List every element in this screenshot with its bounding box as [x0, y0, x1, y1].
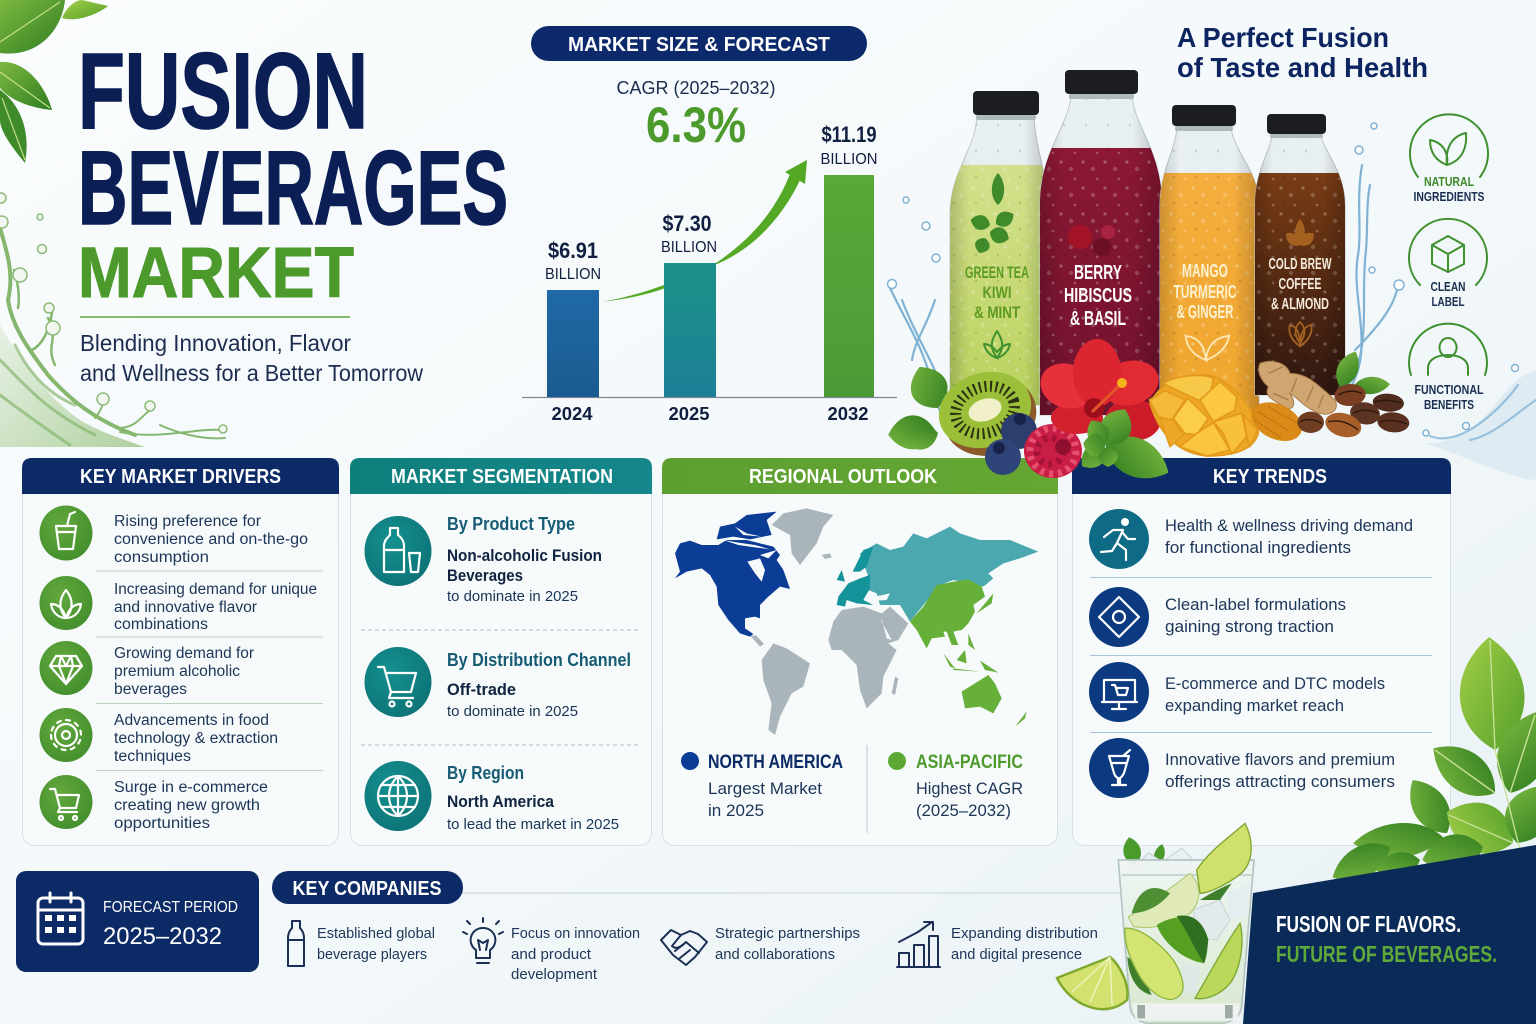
company point: global players: Established global — [317, 925, 435, 942]
segment: product type — [364, 514, 602, 605]
segment: distribution channel: By Distribution Channel — [447, 650, 631, 670]
driver: flavor innovation: Increasing demand for unique — [114, 581, 317, 598]
bar: 2032: 2032 — [828, 404, 868, 424]
legend: north america: Largest Market — [708, 779, 822, 798]
bottle: berry hibiscus and basil: & BASIL — [1070, 307, 1126, 330]
feature badge: functional benefits: BENEFITS — [1424, 398, 1474, 412]
bar: 2024: 2024 — [552, 404, 592, 424]
forecast period box: FORECAST PERIOD — [103, 899, 238, 916]
bottle: cold brew coffee and almond: & ALMOND — [1271, 296, 1329, 313]
trend: health and wellness — [1089, 509, 1413, 569]
bottle: cold brew coffee and almond — [1250, 114, 1350, 398]
company point: innovation — [463, 918, 640, 983]
bar: 2025 — [661, 211, 717, 424]
feature badge: functional benefits — [1409, 324, 1487, 412]
trend: clean label — [1089, 587, 1346, 647]
segment: distribution channel — [364, 647, 631, 720]
heading: key market drivers: KEY MARKET DRIVERS — [80, 466, 281, 488]
bottle: mango turmeric and ginger: MANGO — [1182, 261, 1228, 281]
legend: north america: in 2025 — [708, 801, 764, 820]
feature badge: functional benefits: FUNCTIONAL — [1414, 383, 1484, 397]
trend: premium offerings: Innovative flavors and premium — [1165, 750, 1395, 769]
bar: 2024 — [545, 238, 601, 424]
bottle: mango turmeric and ginger: TURMERIC — [1174, 282, 1236, 302]
driver: flavor innovation: and innovative flavor — [114, 599, 257, 616]
heading: key trends — [1072, 458, 1451, 494]
feature badge: clean label: CLEAN — [1430, 280, 1466, 294]
bottle: green tea kiwi and mint: KIWI — [982, 283, 1012, 302]
company point: distribution: and digital presence — [951, 946, 1082, 963]
segment: product type: By Product Type — [447, 514, 575, 534]
driver: flavor innovation: combinations — [114, 616, 208, 633]
growth arrow — [603, 160, 807, 302]
driver: premium beverages: premium alcoholic — [114, 663, 240, 680]
forecast period box — [16, 871, 259, 972]
bar chart — [522, 122, 897, 424]
trend: clean label: Clean-label formulations — [1165, 595, 1346, 614]
bottle: green tea kiwi and mint: & MINT — [974, 303, 1020, 322]
heading: regional outlook — [662, 458, 1058, 494]
hibiscus flower — [1034, 339, 1164, 441]
fruit and ingredient cluster — [886, 339, 1410, 490]
market size heading: MARKET SIZE & FORECAST — [568, 33, 830, 56]
heading: market segmentation — [350, 458, 652, 494]
world map — [675, 508, 1038, 735]
mango — [1149, 375, 1258, 456]
mango, ginger, turmeric and coffee beans — [1149, 347, 1410, 456]
segment: distribution channel: Off-trade — [447, 681, 516, 699]
water splash: around bottles — [888, 123, 1404, 428]
subtitle: Blending Innovation, Flavor — [80, 330, 351, 356]
bottle: berry hibiscus and basil — [1035, 70, 1165, 418]
title: BEVERAGES — [78, 130, 508, 247]
legend: asia-pacific: (2025–2032) — [916, 801, 1011, 820]
driver: convenience: convenience and on-the-go — [114, 531, 308, 548]
feature badge: natural ingredients: NATURAL — [1424, 175, 1474, 189]
company point: innovation: Focus on innovation — [511, 925, 640, 942]
segment: region: By Region — [447, 763, 524, 783]
title — [78, 30, 508, 317]
bottle: cold brew coffee and almond: COFFEE — [1278, 276, 1322, 293]
trend: e-commerce and DTC: expanding market reach — [1165, 696, 1344, 715]
driver: flavor innovation — [40, 576, 317, 633]
feature badge: natural ingredients: INGREDIENTS — [1414, 190, 1484, 204]
panel: key trends — [1072, 458, 1451, 846]
trend: health and wellness: for functional ingredients — [1165, 538, 1351, 557]
blueberries — [985, 413, 1037, 475]
trend: health and wellness: Health & wellness driving demand — [1165, 516, 1413, 535]
legend: north america: NORTH AMERICA — [708, 752, 843, 773]
driver: e-commerce: creating new growth — [114, 797, 260, 814]
driver: convenience — [40, 506, 308, 566]
company point: global players: beverage players — [317, 946, 427, 963]
heading: key trends: KEY TRENDS — [1213, 466, 1327, 488]
tagline: taste and health: of Taste and Health — [1177, 52, 1428, 83]
subtitle: and Wellness for a Better Tomorrow — [80, 360, 424, 386]
icon: mojito glass with lime — [1118, 823, 1254, 1023]
bottle: green tea kiwi and mint: GREEN TEA — [965, 263, 1029, 282]
company point: innovation: development — [511, 966, 598, 983]
heading: regional outlook: REGIONAL OUTLOOK — [749, 466, 937, 488]
icon: lime wedge — [1057, 957, 1128, 1009]
company point: partnerships — [661, 925, 860, 965]
coffee beans — [1297, 383, 1410, 441]
driver: e-commerce — [40, 775, 268, 832]
bar: 2024: BILLION — [545, 266, 601, 283]
bar: 2032: BILLION — [820, 151, 878, 168]
water splash: left — [0, 193, 227, 447]
bottle: mango turmeric and ginger — [1160, 105, 1260, 412]
bar: 2025: 2025 — [668, 404, 710, 424]
driver: e-commerce: opportunities — [114, 815, 210, 832]
mint sprig: centre — [1075, 402, 1176, 490]
company point: distribution: Expanding distribution — [951, 925, 1098, 942]
bar: 2025: BILLION — [661, 239, 717, 256]
CAGR callout: 6.3% — [646, 97, 746, 153]
heading: market segmentation: MARKET SEGMENTATION — [391, 466, 613, 488]
segment: product type: Non-alcoholic Fusion — [447, 547, 602, 565]
tagline: taste and health: A Perfect Fusion — [1177, 22, 1389, 53]
ginger — [1259, 361, 1336, 414]
trend: e-commerce and DTC — [1089, 662, 1385, 722]
leaves: beside beans — [1331, 347, 1391, 395]
market size heading — [531, 26, 867, 61]
panel: key market drivers — [22, 458, 339, 846]
bottle: mango turmeric and ginger: & GINGER — [1176, 302, 1234, 322]
driver: food technology — [40, 708, 278, 765]
bottle: berry hibiscus and basil: BERRY — [1074, 261, 1122, 284]
water splash: right edge — [1420, 364, 1536, 480]
segment: region: North America — [447, 793, 555, 811]
driver: e-commerce: Surge in e-commerce — [114, 779, 268, 796]
driver: convenience: Rising preference for — [114, 513, 261, 530]
forecast period box: 2025–2032 — [103, 923, 222, 950]
bottle: cold brew coffee and almond: COLD BREW — [1268, 256, 1332, 273]
kiwi — [929, 360, 1047, 468]
company point: partnerships: and collaborations — [715, 946, 835, 963]
driver: premium beverages — [40, 641, 254, 698]
feature badge: natural ingredients — [1410, 114, 1488, 204]
closing banner — [1243, 845, 1536, 1024]
key companies heading: KEY COMPANIES — [292, 878, 442, 900]
panel: market segmentation — [350, 458, 652, 846]
bar: 2032: $11.19 — [822, 122, 876, 147]
company point: innovation: and product — [511, 946, 592, 963]
feature badge: clean label: LABEL — [1432, 295, 1465, 309]
title: MARKET — [78, 234, 354, 313]
bottle: berry hibiscus and basil: HIBISCUS — [1064, 284, 1132, 307]
company point: global players — [288, 921, 435, 966]
icon: calendar — [38, 893, 83, 944]
bottle: green tea kiwi and mint — [950, 91, 1044, 406]
key companies heading — [272, 871, 1120, 904]
legend: asia-pacific — [888, 752, 1023, 820]
driver: food technology: technology & extraction — [114, 730, 278, 747]
tagline: taste and health — [1177, 22, 1428, 83]
heading: key market drivers — [22, 458, 339, 494]
closing banner: FUSION OF FLAVORS. — [1276, 911, 1461, 937]
subtitle — [80, 330, 424, 386]
trend: e-commerce and DTC: E-commerce and DTC models — [1165, 674, 1385, 693]
driver: convenience: consumption — [114, 549, 209, 566]
driver: premium beverages: beverages — [114, 681, 187, 698]
legend: asia-pacific: Highest CAGR — [916, 779, 1023, 798]
trend: clean label: gaining strong traction — [1165, 617, 1334, 636]
leaves: top-left corner — [0, 0, 108, 163]
company point: partnerships: Strategic partnerships — [715, 925, 860, 942]
driver: food technology: Advancements in food — [114, 712, 269, 729]
CAGR callout: CAGR (2025–2032) — [616, 77, 776, 98]
CAGR callout — [616, 77, 776, 153]
legend: asia-pacific: ASIA-PACIFIC — [916, 752, 1023, 773]
driver: food technology: techniques — [114, 748, 191, 765]
leaves: bottom-right — [1325, 635, 1536, 891]
trend: premium offerings — [1089, 738, 1395, 798]
raspberry — [1024, 424, 1082, 478]
bar: 2024: $6.91 — [548, 238, 598, 263]
legend: north america — [681, 752, 843, 820]
segment: region — [364, 761, 619, 833]
turmeric — [1245, 395, 1308, 449]
bar: 2032 — [820, 122, 878, 424]
driver: premium beverages: Growing demand for — [114, 645, 254, 662]
segment: distribution channel: to dominate in 2025 — [447, 704, 578, 720]
segment: region: to lead the market in 2025 — [447, 817, 619, 833]
trend: premium offerings: offerings attracting consumers — [1165, 772, 1395, 791]
segment: product type: Beverages — [447, 567, 523, 585]
bar: 2025: $7.30 — [662, 211, 712, 236]
feature badge: clean label — [1409, 219, 1487, 309]
segment: product type: to dominate in 2025 — [447, 589, 578, 605]
panel: regional outlook — [662, 458, 1058, 846]
title: FUSION — [78, 30, 368, 151]
mint sprig: left — [886, 359, 955, 454]
company point: distribution — [897, 922, 1098, 967]
